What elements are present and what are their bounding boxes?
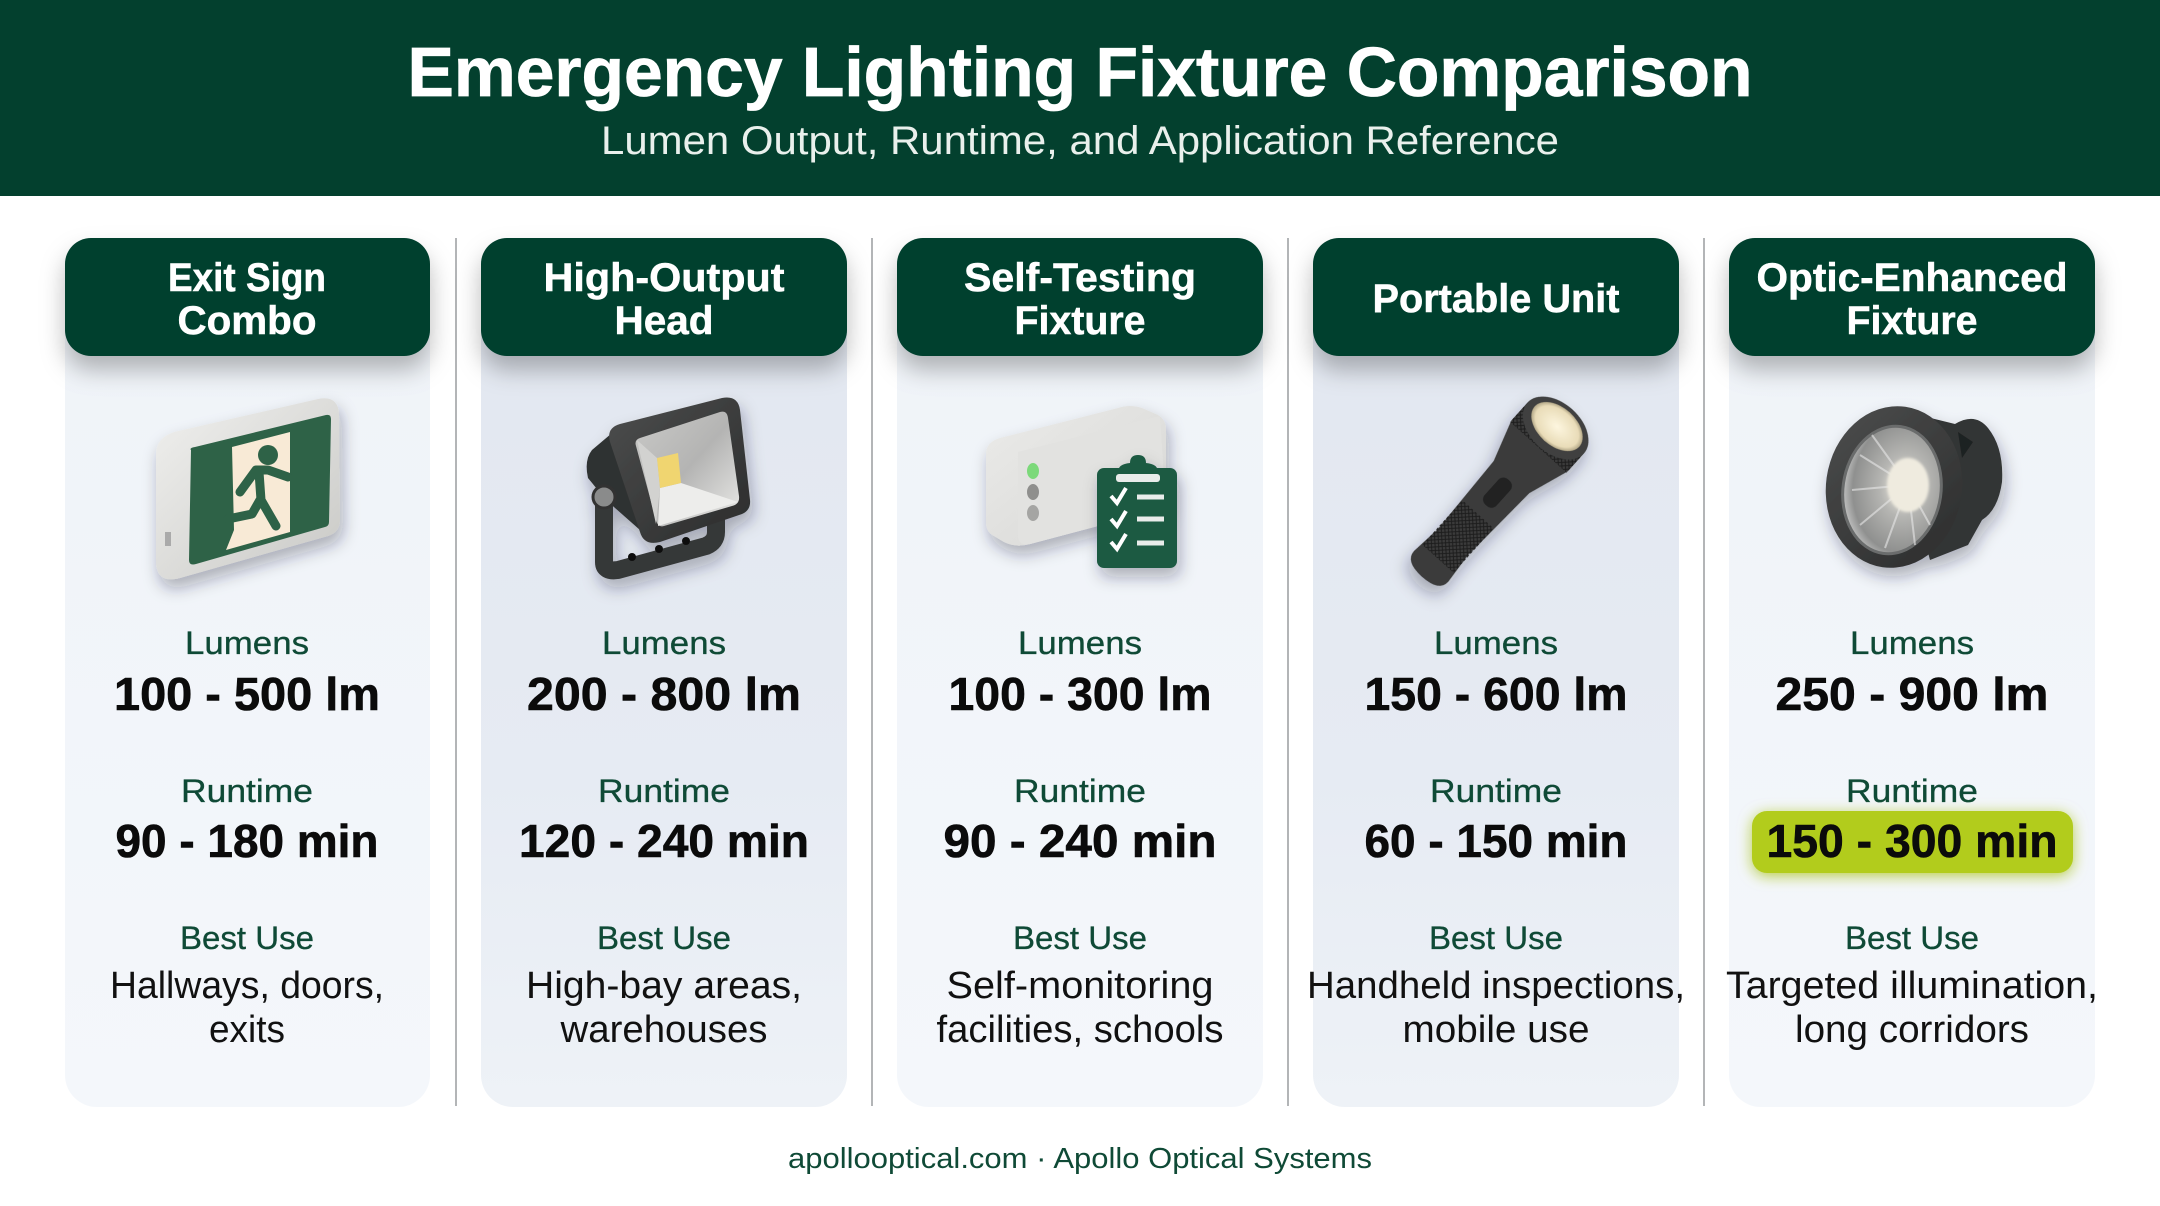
best use: Self-monitoring — [946, 965, 1214, 1007]
heading: Self-Testing — [964, 256, 1196, 300]
heading — [897, 238, 1263, 356]
panel: Portable Unit — [1307, 238, 1685, 1107]
runtime highlighted — [1752, 773, 2073, 873]
lumens — [1364, 625, 1628, 720]
best use — [936, 920, 1224, 1051]
heading: Head — [614, 299, 714, 343]
heading — [481, 238, 847, 356]
heading: Fixture — [1014, 299, 1146, 343]
heading: Exit Sign — [168, 256, 326, 300]
best use: Best Use — [597, 920, 731, 956]
runtime: 120 - 240 min — [519, 815, 809, 867]
icon: optic lens fixture — [1815, 397, 2002, 577]
best use: warehouses — [559, 1009, 768, 1051]
lumens: 100 - 300 lm — [948, 668, 1212, 720]
heading: High-Output — [544, 256, 784, 300]
lumens: Lumens — [1018, 625, 1142, 661]
best use: Hallways, doors, — [110, 965, 384, 1007]
best use: Targeted illumination, — [1726, 965, 2098, 1007]
best use — [1726, 920, 2098, 1051]
footer: apollooptical.com · Apollo Optical Systems — [788, 1143, 1372, 1175]
best use: Best Use — [1845, 920, 1979, 956]
lumens: Lumens — [1850, 625, 1974, 661]
runtime — [519, 773, 809, 867]
icon: exit sign — [156, 398, 340, 579]
heading: Combo — [178, 299, 316, 343]
title: Emergency Lighting Fixture Comparison — [408, 33, 1752, 111]
icon: self-testing unit with clipboard — [986, 406, 1177, 568]
best use — [1307, 920, 1685, 1051]
lumens: Lumens — [185, 625, 309, 661]
runtime highlighted: Runtime — [1846, 773, 1978, 809]
runtime — [1364, 773, 1628, 867]
best use: long corridors — [1795, 1009, 2029, 1051]
best use: mobile use — [1402, 1009, 1590, 1051]
card background — [481, 280, 847, 1107]
heading: Fixture — [1846, 299, 1978, 343]
best use: facilities, schools — [936, 1009, 1224, 1051]
best use — [526, 920, 802, 1051]
heading — [1313, 238, 1679, 356]
lumens — [948, 625, 1212, 720]
panel: High-Output Head — [481, 238, 847, 1107]
runtime — [116, 773, 378, 867]
heading: Optic-Enhanced — [1756, 256, 2068, 300]
card background — [897, 280, 1263, 1107]
runtime: 60 - 150 min — [1364, 815, 1628, 867]
panel: Exit Sign Combo — [65, 238, 430, 1107]
lumens — [1776, 625, 2048, 720]
card background — [1729, 280, 2095, 1107]
best use: Best Use — [1429, 920, 1563, 956]
best use: Best Use — [1013, 920, 1147, 956]
lumens: Lumens — [1434, 625, 1558, 661]
panel: Optic-Enhanced Fixture — [1726, 238, 2098, 1107]
runtime: Runtime — [1014, 773, 1146, 809]
lumens: 150 - 600 lm — [1364, 668, 1628, 720]
runtime: 90 - 180 min — [116, 815, 378, 867]
best use: exits — [209, 1009, 285, 1051]
subtitle: Lumen Output, Runtime, and Application Reference — [601, 119, 1559, 163]
best use — [110, 920, 384, 1051]
highlight badge — [1752, 811, 2073, 873]
lumens — [114, 625, 380, 720]
lumens: 250 - 900 lm — [1776, 668, 2048, 720]
heading — [1729, 238, 2095, 356]
panel: Self-Testing Fixture — [897, 238, 1263, 1107]
card background — [65, 280, 430, 1107]
clipboard — [1097, 455, 1177, 568]
runtime highlighted: 150 - 300 min — [1766, 815, 2058, 867]
heading — [65, 238, 430, 356]
best use: Handheld inspections, — [1307, 965, 1685, 1007]
header banner — [0, 0, 2160, 196]
device box — [986, 406, 1166, 546]
lumens — [527, 625, 801, 720]
heading: Portable Unit — [1372, 277, 1620, 321]
best use: Best Use — [180, 920, 314, 956]
runtime: Runtime — [1430, 773, 1562, 809]
runtime — [944, 773, 1216, 867]
best use: High-bay areas, — [526, 965, 802, 1007]
lumens: 100 - 500 lm — [114, 668, 380, 720]
icon: flashlight — [1394, 384, 1601, 602]
card background — [1313, 280, 1679, 1107]
runtime: Runtime — [181, 773, 313, 809]
lumens: 200 - 800 lm — [527, 668, 801, 720]
runtime: Runtime — [598, 773, 730, 809]
runtime: 90 - 240 min — [944, 815, 1216, 867]
lumens: Lumens — [602, 625, 726, 661]
icon: flood light — [587, 398, 750, 570]
